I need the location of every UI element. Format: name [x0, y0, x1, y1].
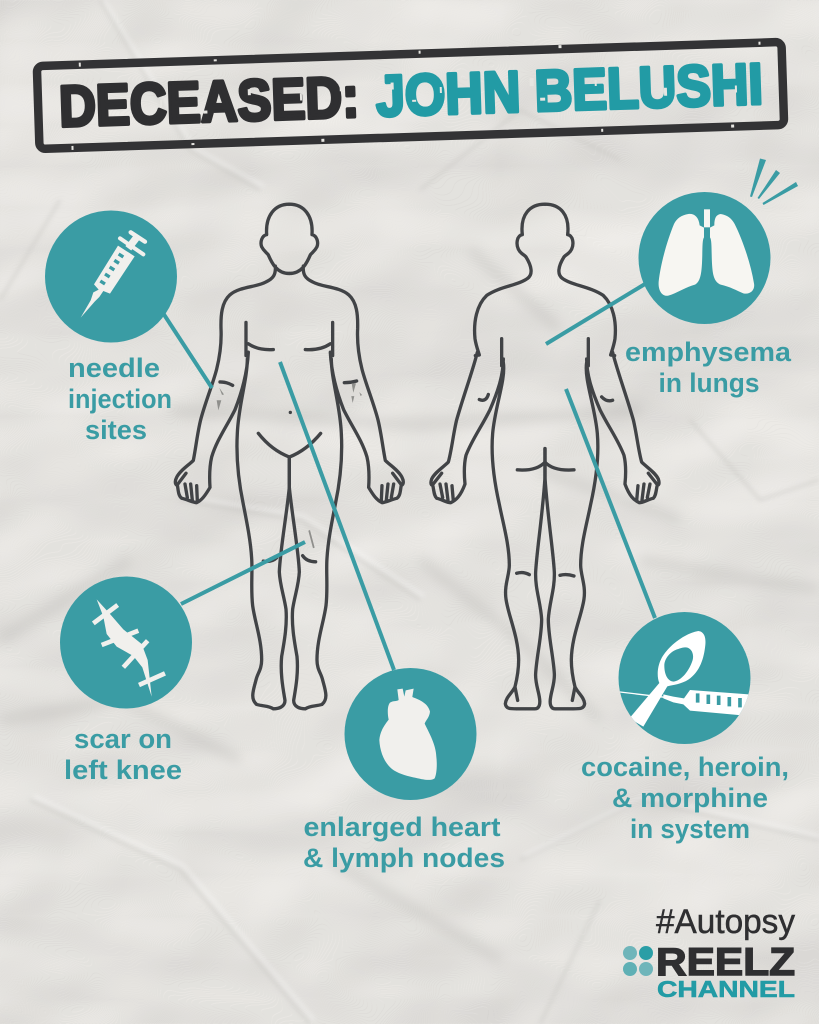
icon: emphasis rays — [750, 158, 798, 205]
label: cocaine, heroin and morphine in system — [581, 752, 789, 844]
label: enlarged heart and lymph nodes: & lymph nodes — [303, 843, 505, 873]
back left half — [431, 204, 545, 709]
connector lines — [163, 284, 655, 670]
front right half — [289, 204, 403, 709]
logo dots — [623, 946, 653, 976]
label: cocaine, heroin and morphine in system: & morphine — [612, 783, 768, 813]
icon: heart in circle — [344, 668, 476, 800]
front left half — [175, 204, 289, 709]
title text: john belushi: JOHN BELUSHI — [375, 52, 764, 129]
icon: spoon and syringe in circle — [618, 612, 757, 744]
body: front view — [175, 204, 403, 709]
connector: heart — [280, 362, 394, 670]
stamp border — [37, 42, 784, 149]
label: enlarged heart and lymph nodes — [303, 812, 505, 873]
title text: deceased: DECEASED: — [58, 65, 360, 139]
label: scar on left knee: left knee — [64, 755, 182, 785]
connector: scar — [181, 542, 305, 604]
body: back view — [431, 204, 659, 709]
navel — [289, 411, 292, 414]
connector: lungs — [546, 284, 645, 344]
label: emphysema in lungs — [625, 337, 792, 398]
needle marks and scar — [217, 383, 362, 548]
buttock line — [517, 462, 574, 470]
label: needle injection sites: injection — [68, 384, 172, 414]
reelz channel logo — [623, 941, 795, 1002]
label: scar on left knee — [64, 724, 182, 785]
label: enlarged heart and lymph nodes: enlarged heart — [304, 812, 501, 842]
distress specks — [69, 39, 763, 150]
elbow and knee creases — [479, 394, 613, 576]
hashtag: #Autopsy — [656, 903, 795, 941]
label: cocaine, heroin and morphine in system: cocaine, heroin, — [581, 752, 789, 782]
title stamp — [37, 38, 784, 151]
back right half — [545, 204, 659, 709]
label: emphysema in lungs: emphysema — [625, 337, 792, 367]
groin line — [258, 433, 321, 457]
icon: syringe in circle — [45, 210, 177, 342]
label: cocaine, heroin and morphine in system: in system — [630, 814, 750, 844]
elbow and knee creases — [220, 381, 357, 562]
logo wordmark: REELZ — [656, 941, 795, 984]
logo channel: CHANNEL — [657, 976, 795, 1002]
icon: lungs in circle — [638, 192, 770, 324]
label: scar on left knee: scar on — [74, 724, 172, 754]
label: needle injection sites — [68, 353, 172, 445]
label: needle injection sites: sites — [85, 415, 147, 445]
label: emphysema in lungs: in lungs — [658, 368, 760, 398]
connector: needle sites — [163, 313, 212, 388]
icon: scar in circle — [60, 576, 192, 708]
label: needle injection sites: needle — [68, 353, 160, 383]
connector: drugs — [566, 389, 655, 618]
